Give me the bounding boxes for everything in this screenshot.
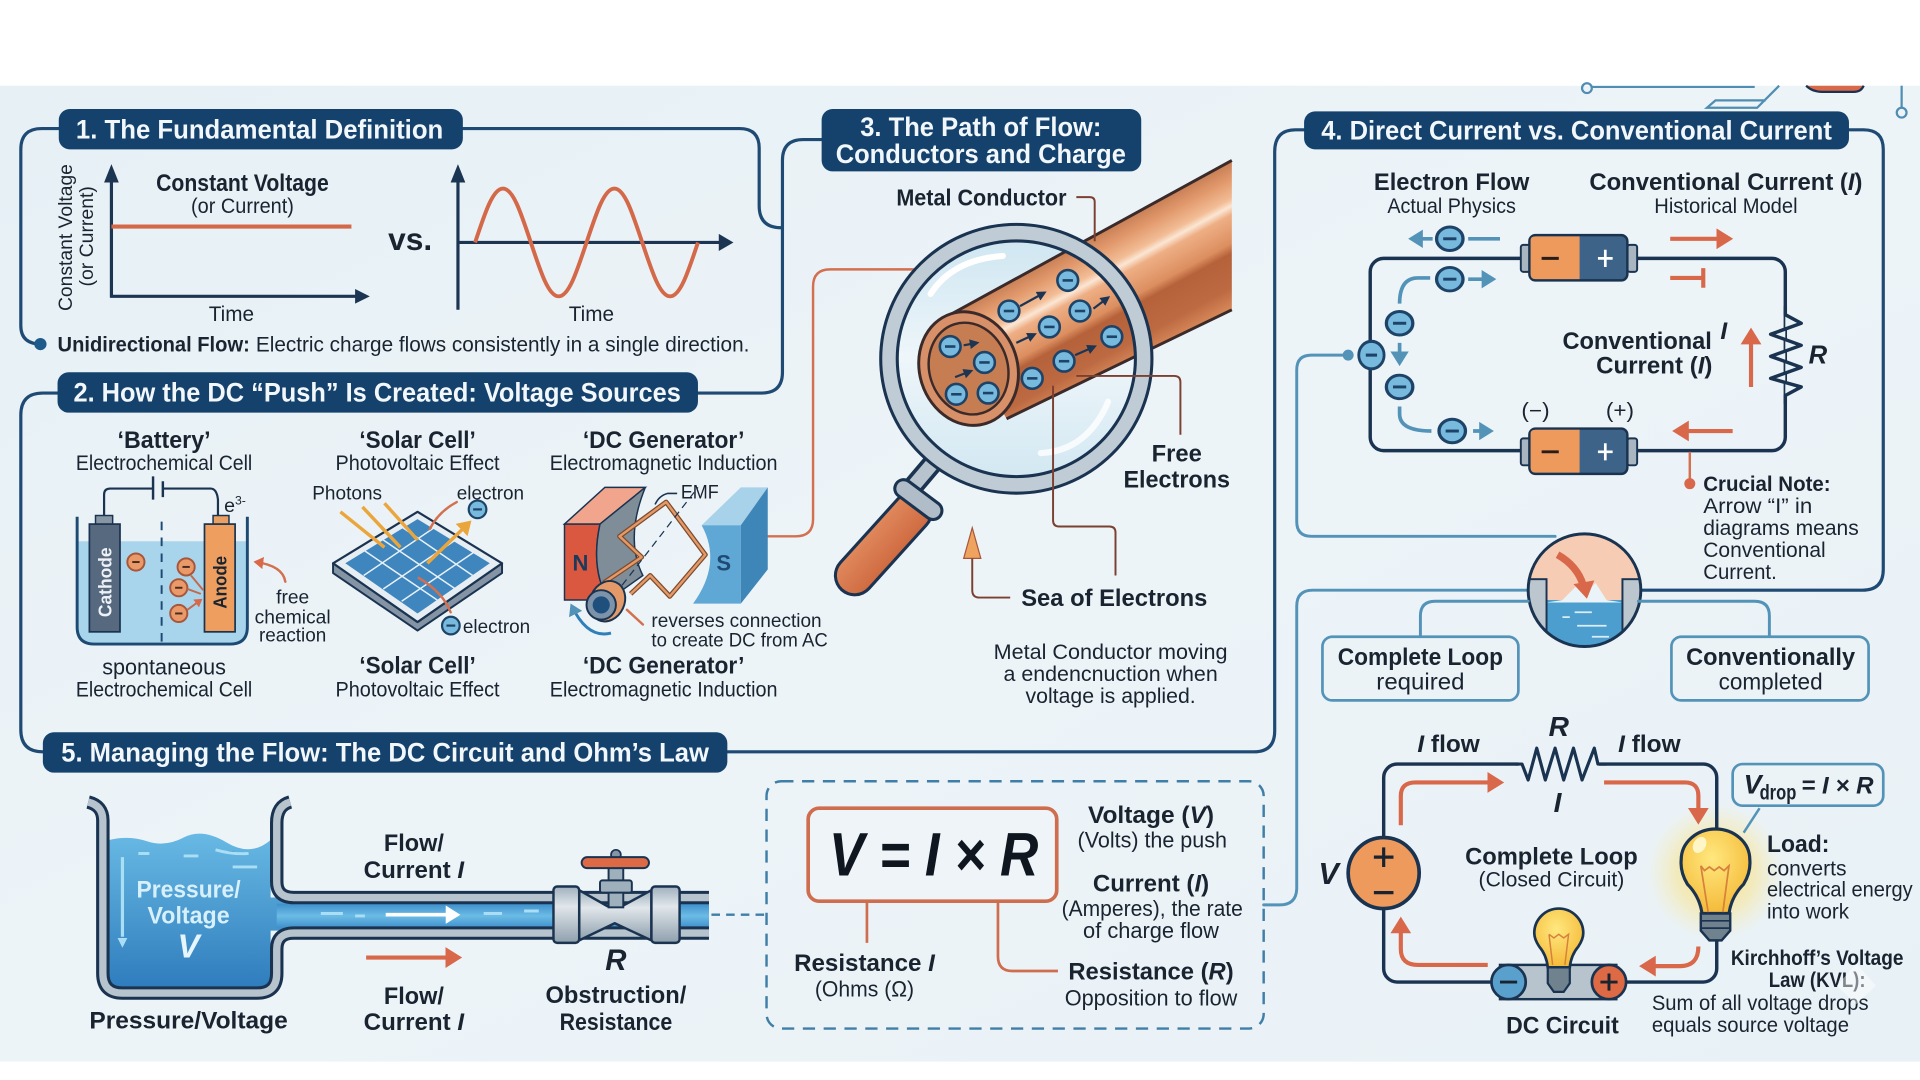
electron flow heading — [1374, 169, 1530, 218]
flow labels below pipe: Current I — [364, 1009, 465, 1036]
free chemical reaction label: free — [276, 588, 309, 609]
callout: voltage drop formula: drop — [1760, 782, 1796, 805]
flow labels below pipe — [364, 983, 465, 1036]
free chemical reaction label: chemical — [255, 607, 331, 628]
icon: DC generator: EMF — [681, 482, 719, 503]
icon: solar panel: Photons — [312, 484, 382, 505]
spontaneous electrochemical caption — [76, 655, 252, 702]
callout: conventionally completed — [1671, 637, 1869, 700]
complete loop label — [1465, 843, 1638, 892]
conventional current heading: Historical Model — [1654, 195, 1798, 218]
panel 1: fundamental definition — [34, 109, 749, 356]
spontaneous electrochemical caption: Electrochemical Cell — [76, 679, 252, 702]
heading 4: 4. Direct Current vs. Conventional Current — [1321, 116, 1832, 146]
heading 1: 1. The Fundamental Definition — [76, 114, 443, 144]
callout: complete loop required — [1322, 637, 1518, 700]
icon: electrochemical battery: e — [224, 495, 235, 517]
circuit diagram: Current (I) — [1596, 352, 1712, 379]
callout: voltage drop formula — [1733, 764, 1883, 833]
closed DC circuit diagram: I flow — [1417, 731, 1481, 758]
icon: electrochemical battery: Anode — [210, 556, 231, 609]
free chemical reaction label: reaction — [259, 626, 326, 647]
label: metal conductor — [896, 185, 1095, 241]
voltage source — [1348, 838, 1419, 909]
complete loop label: (Closed Circuit) — [1479, 869, 1624, 892]
free chemical reaction label — [255, 588, 331, 647]
Kirchhoff's voltage law note: Law (KVL): — [1769, 969, 1866, 992]
crucial note — [1684, 452, 1859, 584]
conductor description: voltage is applied. — [1026, 685, 1196, 708]
battery: bottom — [1521, 429, 1637, 474]
solar cell titles: Photovoltaic Effect — [336, 452, 500, 475]
Kirchhoff's voltage law note: Sum of all voltage drops — [1652, 992, 1869, 1015]
conductor description: Metal Conductor moving — [994, 641, 1228, 664]
chart: AC sine wave — [451, 164, 733, 326]
label: free electrons: Electrons — [1123, 466, 1230, 493]
illustration: magnifier over copper wire — [855, 160, 1232, 576]
unidirectional flow note — [34, 333, 749, 356]
label: sea of electrons — [964, 386, 1207, 612]
closed DC circuit diagram: V — [1318, 857, 1341, 891]
definition: current: of charge flow — [1083, 918, 1219, 943]
chart: constant DC voltage: Constant Voltage — [156, 170, 329, 197]
circuit diagram: (+) — [1606, 400, 1634, 423]
unidirectional flow note: Electric charge flows consistently in a single direction. — [256, 333, 749, 356]
definition: current: Current (I) — [1093, 870, 1209, 897]
connectors to loop boxes — [1420, 601, 1769, 637]
panel: Ohm's law formula — [767, 781, 1264, 1029]
Kirchhoff's voltage law note: equals source voltage — [1652, 1014, 1849, 1037]
battery source titles — [76, 427, 252, 475]
callout: voltage drop formula: V — [1744, 769, 1764, 799]
flow labels above pipe: Current I — [364, 857, 465, 884]
icon: DC generator: to create DC from AC — [651, 631, 828, 652]
heading 5: 5. Managing the Flow: The DC Circuit and Ohm’s Law — [61, 738, 709, 768]
definition: voltage: (Volts) the push — [1078, 827, 1227, 852]
definition: current: (Amperes), the rate — [1062, 896, 1243, 921]
heading 3: Conductors and Charge — [836, 139, 1126, 169]
circuit diagram: I — [1720, 318, 1728, 345]
heading 2: 2. How the DC “Push” Is Created: Voltage Sources — [73, 378, 681, 408]
panel 3: conductors and charge — [822, 109, 1232, 708]
icon: electrochemical battery: 3- — [235, 493, 246, 507]
Kirchhoff's voltage law note — [1652, 947, 1903, 1037]
electron flow heading: Electron Flow — [1374, 169, 1530, 196]
dashed connector pipe to formula — [711, 914, 767, 916]
label: obstruction resistance: Resistance — [560, 1009, 672, 1036]
chart: constant DC voltage: Constant Voltage — [56, 164, 77, 311]
icon: electrochemical battery — [77, 476, 285, 644]
definition: resistance R: Resistance (R) — [1068, 959, 1234, 986]
callout: voltage drop formula: = I × R — [1801, 772, 1874, 799]
vs label: vs. — [388, 221, 432, 257]
electron flow heading: Actual Physics — [1387, 195, 1516, 218]
formula box: V = I × R — [829, 821, 1038, 889]
icon: solar panel — [312, 484, 530, 638]
spontaneous electrochemical caption: spontaneous — [102, 655, 226, 680]
load description: electrical energy — [1767, 878, 1913, 901]
illustration: water tank and pipe — [88, 802, 709, 993]
label: obstruction resistance: Obstruction/ — [546, 982, 687, 1009]
icon: DC generator: S — [716, 551, 731, 576]
DC generator caption: Electromagnetic Induction — [550, 679, 778, 702]
solar cell caption: Photovoltaic Effect — [336, 679, 500, 702]
sparkle watermark — [1837, 964, 1876, 1004]
circuit diagram: (−) — [1521, 400, 1550, 423]
DC generator titles: ‘DC Generator’ — [583, 427, 744, 454]
callout: complete loop required: required — [1376, 668, 1464, 694]
icon: solar panel: electron — [457, 484, 524, 505]
closed DC circuit diagram: R — [1549, 711, 1570, 742]
closed DC circuit diagram: I — [1554, 787, 1563, 818]
flow labels above pipe: Flow/ — [384, 830, 444, 857]
load description: into work — [1767, 900, 1850, 923]
battery source titles: Electrochemical Cell — [76, 452, 252, 475]
icon: DC generator: N — [572, 551, 588, 576]
connector lines between sections — [21, 129, 1883, 905]
chart: constant DC voltage — [56, 164, 370, 326]
definition: resistance I — [794, 950, 936, 1002]
label: sea of electrons: Sea of Electrons — [1021, 585, 1207, 612]
Kirchhoff's voltage law note: Kirchhoff’s Voltage — [1731, 947, 1903, 970]
closed DC circuit diagram: DC Circuit — [1506, 1012, 1619, 1039]
chart: constant DC voltage: Time — [209, 303, 254, 326]
DC generator caption — [550, 652, 778, 702]
load description: converts — [1767, 858, 1847, 881]
crucial note: diagrams means — [1703, 517, 1859, 540]
icon: DC generator: reverses connection — [651, 611, 822, 632]
current arrows — [1401, 782, 1698, 966]
crucial note: Conventional — [1703, 539, 1826, 562]
unidirectional flow note: Unidirectional Flow: — [58, 333, 250, 356]
electrons moving along the loop — [1343, 227, 1500, 443]
battery: top — [1521, 235, 1637, 280]
crucial note: Crucial Note: — [1703, 473, 1831, 496]
icon: glowing bulb — [1681, 829, 1750, 940]
callout: conventionally completed: completed — [1719, 668, 1823, 694]
panel 4: direct vs conventional current — [1304, 111, 1862, 584]
callout: complete loop required: Complete Loop — [1338, 644, 1503, 671]
illustration: water tank and pipe: Voltage — [148, 902, 230, 929]
closed DC circuit diagram: I flow — [1618, 731, 1682, 758]
chart: AC sine wave: Time — [569, 303, 614, 326]
circuit diagram: R — [1809, 342, 1828, 370]
crucial note: Current. — [1703, 561, 1777, 584]
heading 3 — [822, 109, 1141, 171]
flow labels below pipe: Flow/ — [384, 983, 444, 1010]
free electrons inside wire — [940, 270, 1122, 405]
icon: DC generator — [564, 482, 828, 652]
solar cell titles: ‘Solar Cell’ — [359, 427, 476, 454]
label: obstruction resistance: R — [605, 944, 627, 977]
conductor description — [994, 641, 1228, 708]
definition: resistance R: Opposition to flow — [1065, 985, 1237, 1010]
label: free electrons: Free — [1152, 441, 1202, 468]
heading 3: 3. The Path of Flow: — [860, 112, 1101, 142]
definition: resistance I: Resistance I — [794, 950, 936, 977]
resistor — [1516, 748, 1607, 780]
solar cell titles — [336, 427, 500, 475]
DC source with small bulb — [1491, 909, 1626, 999]
crucial note: Arrow “I” in — [1703, 495, 1812, 518]
complete loop label: Complete Loop — [1465, 843, 1638, 870]
flow labels above pipe — [364, 830, 465, 884]
definition: resistance R — [1065, 959, 1237, 1010]
callout: conventionally completed: Conventionally — [1686, 644, 1855, 671]
illustration: water tank and pipe: Pressure/ — [137, 877, 241, 904]
DC generator titles: Electromagnetic Induction — [550, 452, 778, 475]
definition: resistance I: (Ohms (Ω) — [815, 977, 914, 1002]
load description — [1767, 831, 1913, 923]
icon: valve — [553, 850, 680, 943]
conductor description: a endencnuction when — [1003, 663, 1218, 686]
battery source titles: ‘Battery’ — [118, 427, 211, 454]
definition: voltage — [1078, 802, 1227, 852]
label: free electrons — [1076, 376, 1230, 493]
icon: water loop circle — [1528, 533, 1641, 649]
solar cell caption: ‘Solar Cell’ — [359, 652, 476, 679]
definition: voltage: Voltage (V) — [1088, 802, 1214, 829]
circuit diagram: Conventional — [1562, 328, 1712, 355]
circuit diagram — [1343, 227, 1828, 474]
definition: current — [1062, 870, 1243, 943]
load description: Load: — [1767, 831, 1829, 858]
decorative circuit traces top right — [1582, 83, 1907, 118]
label: obstruction resistance — [546, 944, 687, 1036]
solar cell caption — [336, 652, 500, 702]
DC generator titles — [550, 427, 778, 475]
label: metal conductor: Metal Conductor — [896, 185, 1067, 211]
arrow: flow direction — [366, 956, 458, 959]
label: pressure voltage: Pressure/Voltage — [89, 1008, 288, 1035]
conventional current heading: Conventional Current (I) — [1589, 169, 1862, 196]
panel 5: managing the flow — [43, 732, 1264, 1036]
formula box — [808, 808, 1057, 901]
closed DC circuit diagram — [1318, 711, 1784, 1039]
panel 2: voltage sources — [58, 372, 828, 702]
DC generator caption: ‘DC Generator’ — [583, 652, 744, 679]
icon: solar panel: electron — [463, 617, 530, 638]
chart: constant DC voltage: (or Current) — [191, 195, 294, 218]
chart: constant DC voltage: (or Current) — [77, 186, 98, 287]
conventional current heading — [1589, 169, 1862, 218]
icon: electrochemical battery: Cathode — [94, 547, 115, 617]
illustration: water tank and pipe: V — [178, 929, 203, 966]
